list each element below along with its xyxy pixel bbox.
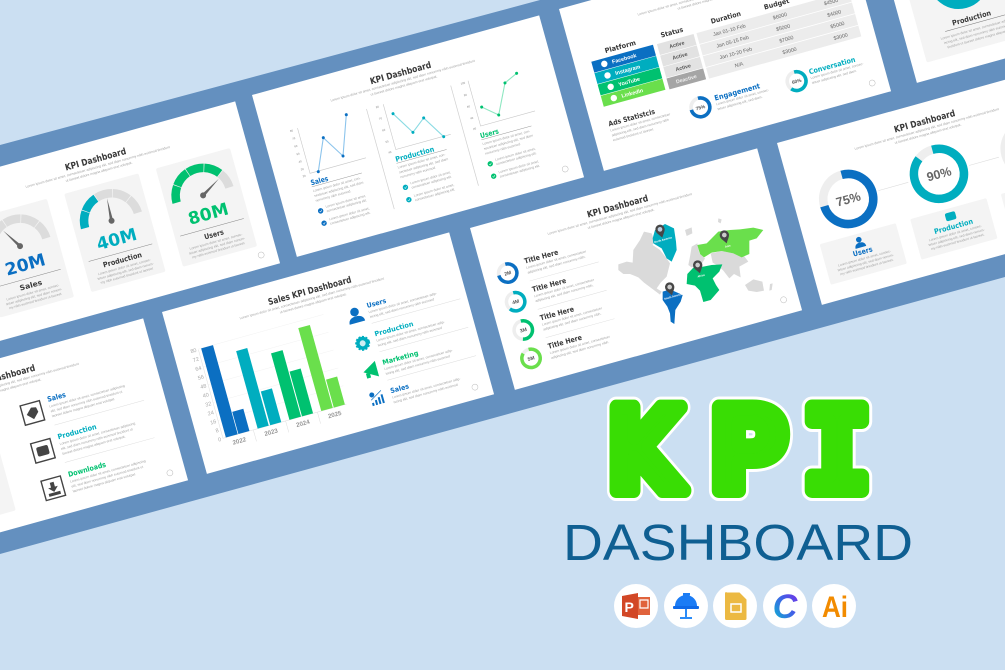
duration and budget table (694, 0, 861, 79)
text block: users (479, 118, 543, 181)
donut: engagement: 75% (695, 104, 707, 112)
bar chart: 2022 (232, 436, 248, 447)
bar chart: 16 (210, 419, 217, 426)
list item: production: laoreet dolore magna aliquam erat volutpat. (62, 434, 126, 456)
line chart: users: 20 (473, 126, 477, 131)
legend item: sales: Sales (389, 382, 410, 395)
donut: conversation (785, 53, 866, 93)
donut: conversation: tetuer adipiscing elit, sed diam. (811, 69, 857, 85)
subtitle: DASHBOARD: DASHBOARD (563, 514, 913, 571)
panel: icon list slide (0, 318, 188, 560)
map labels: Asia (724, 243, 731, 249)
donut card: users (803, 164, 907, 285)
stat: 5M: 5M (527, 355, 535, 363)
duration and budget table: $6000 (772, 12, 788, 22)
legend item: sales: Lorem ipsum dolor sit amet, consectetuer adip- (392, 377, 461, 400)
stat: 4M: Title Here (531, 276, 567, 294)
duration and budget table: $5000 (830, 21, 845, 30)
title: KPI: P (709, 385, 788, 518)
bar chart: 2024 (295, 419, 311, 429)
icon: Canva (763, 584, 807, 628)
text block: production: nonummy nibh euismod. (400, 166, 437, 179)
map pin: South America (664, 281, 676, 297)
duration and budget table: $3000 (833, 32, 849, 42)
stat: 3M: 3M (519, 327, 528, 335)
line chart: sales: 30 (300, 167, 305, 172)
title: KPI: I (803, 384, 871, 518)
donut card: production: my nibh euismod tincidunt ut laoreet. (931, 232, 985, 251)
text block: users: consectetuer adipiscing elit. (496, 151, 537, 166)
stat: 5M: adipiscing elit, sed diam nonummy nibh. (551, 340, 610, 360)
donut: conversation: 60% (791, 78, 803, 86)
legend item: sales (369, 369, 462, 410)
text block: production: Production (394, 144, 435, 164)
stat: 4M (504, 266, 607, 317)
status column: Active (672, 52, 689, 62)
legend item: production: Production (374, 320, 414, 338)
panel: line chart slide (252, 15, 584, 257)
legend item: users: Users (366, 297, 387, 310)
stat: 2M (496, 238, 599, 289)
legend item: production (354, 306, 468, 357)
legend item: production: iscing elit, sed diam nonummy nibh euismod (377, 326, 443, 347)
panel: world map slide: KPI Dashboard (586, 194, 650, 220)
text block: sales: consectetuer adipiscing elit. (330, 211, 371, 226)
line chart: users: 40 (470, 116, 474, 120)
line chart: production: 80 (375, 104, 380, 109)
list item: production: elit, sed diam nonummy nibh euismod tincidunt ut (61, 427, 133, 451)
legend item: marketing: iscing elit, sed diam nonummy nibh euismod (385, 354, 450, 376)
bar chart: 72 (192, 357, 200, 364)
panel: gauge slide: Lorem ipsum dolor sit amet, consectetuer adipiscing elit, sed diam nonummy nibh euismod tincidunt (25, 145, 170, 189)
duration and budget table: $4000 (827, 9, 842, 19)
gauge card: production (64, 173, 166, 292)
icon: Illustrator: Ai (822, 591, 848, 624)
panel: line chart slide: Lorem ipsum dolor sit amet, consectetuer adipiscing elit, sed diam nonummy nibh euismod tincidunt (330, 59, 475, 103)
stat: 3M: Title Here (539, 304, 575, 322)
ads statistics text: Ads Statistcis (608, 108, 656, 128)
donut card: users: Lorem ipsum dolor sit amet, consec- (838, 249, 891, 268)
duration and budget table: $3000 (782, 47, 798, 56)
legend item: users: iscing elit, sed diam nonummy nibh euismod (369, 297, 435, 319)
donut card: third partial (984, 114, 1005, 235)
panel: world map slide: ut laoreet dolore magna aliquam erat volutpat. (587, 208, 655, 230)
status column (654, 23, 706, 89)
list item: downloads: Downloads (67, 460, 107, 479)
legend item: sales: iscing elit, sed diam nonummy nibh euismod (393, 383, 458, 404)
bar chart (190, 312, 351, 452)
gauge card: users (156, 148, 257, 267)
duration and budget table: Jan 01-10 Feb (713, 23, 747, 38)
gauge card: users: my nibh euismod tincidunt ut laoreet (192, 241, 245, 259)
panel: gauge slide: KPI Dashboard (64, 147, 128, 173)
ads statistics text: Lorem ipsum dolor sit amet, consectetuer (610, 112, 672, 133)
donut card: users: tetuer adipiscing elit, sed diam nonum- (837, 253, 894, 272)
line chart: sales: 60 (294, 144, 298, 148)
ads statistics text: adipiscing elit, sed diam nonummy nibh (611, 118, 669, 137)
map pin: Asia (719, 229, 731, 245)
text block: users: Users (479, 127, 500, 140)
stat: 3M (511, 295, 614, 345)
platform column: LinkedIn (621, 88, 644, 100)
donut card: production: 90% (925, 164, 953, 184)
list item: downloads: laoreet dolore magna aliquam erat volutpat. (72, 472, 136, 493)
list item: downloads: elit, sed diam nonummy nibh euismod tincidunt ut (71, 465, 144, 489)
map labels: South America (664, 292, 683, 301)
duration and budget table: $7000 (779, 35, 794, 45)
panel: world map slide: Lorem ipsum dolor sit amet, consectetuer adipiscing elit, sed diam nonummy nibh euismod tincidunt (547, 192, 692, 236)
gauge card: sales (0, 199, 74, 318)
gauge card: production: 40M (94, 225, 139, 255)
duration and budget table: $5000 (776, 23, 791, 33)
duration and budget table: Jan 10-20 Feb (719, 46, 753, 61)
map labels (654, 235, 731, 301)
gauge card: users: 80M (186, 200, 231, 230)
gauge card: production: my nibh euismod tincidunt ut laoreet (100, 266, 154, 285)
bar chart: 2023 (264, 427, 279, 438)
list item: downloads: Lorem ipsum dolor sit amet, consectetuer adipiscing (70, 459, 146, 484)
stat: 4M: adipiscing elit, sed diam nonummy nibh. (535, 283, 594, 303)
stat: 2M: adipiscing elit, sed diam nonummy nibh. (527, 255, 586, 275)
gauge card: users: Users (203, 227, 225, 241)
panel: gauge slide (0, 101, 280, 343)
line chart: sales: 50 (296, 151, 300, 156)
map labels: North America (654, 235, 673, 244)
legend item: marketing: Lorem ipsum dolor sit amet, consectetuer adip- (384, 348, 453, 371)
icon: Google Slides (713, 584, 757, 628)
text block: production: Lorem ipsum dolor sit amet, (413, 183, 455, 198)
donut: engagement: tetuer adipiscing elit, sed diam. (717, 95, 763, 111)
panel: gauge slide: ut laoreet dolore magna aliquam erat volutpat. (65, 161, 133, 183)
line chart: production: 70 (378, 116, 383, 121)
bar chart: 24 (207, 410, 215, 418)
gauge card: users: tetuer adipiscing elit, sed diam nonum- (189, 236, 246, 256)
panel: partial top right slide: Production (951, 8, 992, 28)
bar chart: 8 (215, 428, 220, 435)
list item: sales (19, 370, 144, 433)
list item: sales: elit, sed diam nonummy nibh euismod tincidunt ut (50, 390, 123, 413)
stat: 4M: Lorem ipsum dolor sit amet, consectetuer (534, 278, 595, 298)
list item: production: Production (57, 422, 98, 441)
panel: ads table slide (559, 0, 891, 171)
text block: users: Lorem ipsum dolor sit amet, (498, 159, 540, 174)
bar chart: 0 (218, 437, 222, 444)
donut card: users: Users (852, 245, 873, 259)
map pin: Africa (692, 259, 704, 275)
text block: sales: Lorem ipsum dolor sit amet, con- (312, 176, 361, 193)
text block: production: sectetuer adipiscing elit, sed diam (399, 157, 449, 174)
stat: 2M: 2M (504, 270, 512, 278)
line chart: sales: 80 (290, 128, 294, 133)
list item: downloads (40, 449, 149, 501)
line chart: sales: 20 (302, 174, 307, 178)
panel: line chart slide: KPI Dashboard (369, 61, 432, 87)
text block: users: Lorem ipsum dolor sit amet, (495, 147, 536, 162)
text block: sales: nonummy nibh euismod. (315, 189, 352, 203)
gauge card: production: Production (102, 250, 143, 269)
donut card: users: 75% (834, 189, 862, 210)
panel: donut slide: KPI Dashboard (893, 109, 957, 135)
panel: sales bar chart slide: ut laoreet dolore magna aliquam erat volutpat. (279, 292, 347, 314)
gauge card: production: Lorem ipsum dolor sit amet, consec- (98, 258, 151, 276)
ads statistics text (608, 104, 674, 142)
bar chart: 32 (205, 401, 212, 409)
gauge card: production: tetuer adipiscing elit, sed diam nonum- (97, 262, 154, 281)
bar chart: 64 (195, 366, 202, 373)
legend item: production: Lorem ipsum dolor sit amet, consectetuer adip- (376, 320, 445, 343)
text block: sales: Lorem ipsum dolor sit amet, (325, 194, 366, 209)
line chart: production: 60 (382, 128, 386, 132)
line chart: users: 100 (460, 81, 466, 86)
stat: 5M: Title Here (547, 333, 583, 351)
donut: engagement: Lorem ipsum dolor sit amet, consec- (716, 88, 769, 106)
line chart: production (375, 88, 452, 155)
donut card: production (894, 139, 998, 260)
panel: donut slide (777, 63, 1005, 305)
icon: Canva: C (773, 588, 798, 626)
text block: production: consectetuer adipiscing elit. (411, 175, 452, 190)
platform column: Facebook (611, 53, 637, 66)
status column: Active (669, 40, 685, 50)
status column: Status (660, 26, 684, 40)
panel: donut slide: Lorem ipsum dolor sit amet, consectetuer adipiscing elit, sed diam nonummy nibh euismod tincidunt (854, 107, 999, 151)
text block: users: sectetuer adipiscing elit, sed diam (483, 133, 534, 151)
donut: engagement: Engagement (713, 81, 761, 103)
donut: conversation: Conversation (808, 55, 856, 76)
title: KPI: K (607, 385, 686, 517)
line chart: users (460, 65, 536, 131)
text block: sales: Lorem ipsum dolor sit amet, (329, 206, 370, 221)
list item: production (30, 408, 154, 470)
icon: Illustrator (812, 584, 856, 628)
map pin: North America (654, 224, 667, 239)
icon: PowerPoint: P (624, 599, 634, 615)
gauge card: sales: 20M (3, 250, 48, 281)
text block: sales: Sales (309, 174, 329, 187)
donut: engagement (689, 79, 771, 119)
title: KPI: K (607, 385, 686, 517)
panel: donut slide: ut laoreet dolore magna aliquam erat volutpat. (894, 123, 962, 145)
status column: Deactive (675, 74, 698, 85)
title: KPI (607, 384, 871, 518)
donut: conversation: Lorem ipsum dolor sit amet, consec- (810, 62, 864, 80)
donut card: users: my nibh euismod tincidunt ut laoreet. (840, 258, 894, 276)
line chart: sales: 70 (292, 136, 296, 141)
icon: PowerPoint (614, 584, 658, 628)
gauge card: sales: Sales (19, 278, 43, 293)
donut card: production: tetuer adipiscing elit, sed diam nonum- (928, 228, 985, 247)
stat: 3M: Lorem ipsum dolor sit amet, consectetuer (541, 306, 603, 327)
panel: sales bar chart slide (162, 232, 494, 474)
legend item: marketing (361, 334, 476, 386)
duration and budget table: Duration (710, 10, 742, 26)
donut card: production: Production (933, 217, 974, 236)
legend item: users: Lorem ipsum dolor sit amet, consectetuer adip- (368, 291, 437, 314)
text block: sales (309, 165, 373, 228)
panel: line chart slide: ut laoreet dolore magna aliquam erat volutpat. (370, 74, 438, 97)
stat: 3M: adipiscing elit, sed diam nonummy nibh. (543, 312, 602, 332)
status column: Active (675, 63, 692, 73)
list item: sales: Sales (46, 390, 67, 404)
platform column (588, 35, 665, 107)
duration and budget table: N/A (734, 61, 745, 69)
duration and budget table: Jan 05-15 Feb (716, 35, 750, 50)
bar chart: 48 (200, 383, 207, 391)
gauge card: users: Lorem ipsum dolor sit amet, consec- (189, 232, 243, 251)
panel: sales bar chart slide: Sales KPI Dashboard (267, 275, 353, 308)
world map (618, 218, 773, 324)
stat: 5M: Lorem ipsum dolor sit amet, consectetuer (549, 334, 611, 355)
gauge card: sales: tetuer adipiscing elit, sed diam nonum- (6, 287, 63, 306)
text block: production (394, 141, 458, 204)
map labels: Africa (697, 273, 706, 279)
platform column: YouTube (618, 77, 641, 88)
panel: partial top right slide (872, 0, 1005, 83)
icon: Keynote (664, 584, 708, 628)
bar chart: 40 (202, 392, 210, 400)
gauge card: sales: my nibh euismod tincidunt ut laoreet (9, 292, 62, 310)
stat: 5M (519, 325, 613, 370)
panel: world map slide (470, 148, 802, 390)
text block: users: nonummy nibh euismod. (485, 142, 521, 156)
bar chart: 2025 (327, 410, 343, 420)
text block: production: Lorem ipsum dolor sit amet, (410, 170, 451, 185)
stat: 4M: 4M (512, 299, 520, 306)
text block: production: Lorem ipsum dolor sit amet, con- (397, 153, 446, 170)
text block: production: consectetuer adipiscing elit. (415, 187, 456, 202)
gauge card: sales: Lorem ipsum dolor sit amet, consec- (6, 283, 60, 302)
line chart: sales (289, 111, 367, 178)
list item: production: Lorem ipsum dolor sit amet, consectetuer adipiscing (59, 421, 136, 446)
legend item: marketing: Marketing (382, 349, 419, 367)
list item: sales: laoreet dolore magna aliquam erat volutpat. (51, 397, 116, 418)
stat: 2M: Lorem ipsum dolor sit amet, consectetuer (526, 249, 588, 270)
title: KPI: I (803, 384, 871, 518)
donut card: production: Lorem ipsum dolor sit amet, consec- (928, 224, 982, 242)
stat: 2M: Title Here (523, 247, 559, 266)
platform column: Platform (604, 39, 637, 55)
legend item: users (345, 278, 460, 329)
line chart: production: 40 (388, 150, 392, 155)
bar chart: 80 (190, 348, 197, 355)
panel: sales bar chart slide: Lorem ipsum dolor sit amet, consectetuer adipiscing elit, sed diam nonummy nibh euismod tincidunt (239, 277, 385, 320)
platform column: Instagram (615, 64, 641, 77)
line chart: production: 50 (385, 139, 389, 144)
text block: sales: sectetuer adipiscing elit, sed diam (314, 180, 364, 198)
title: KPI: P (709, 385, 788, 518)
ads statistics text: euismod tincidunt ut laoreet. (613, 127, 655, 142)
text block: users: Lorem ipsum dolor sit amet, con- (482, 129, 531, 146)
line chart: sales: 40 (298, 159, 303, 164)
list item: sales: Lorem ipsum dolor sit amet, consectetuer adipiscing (49, 384, 125, 409)
text block: users: consectetuer adipiscing elit. (499, 164, 541, 179)
text block: sales: consectetuer adipiscing elit. (326, 198, 368, 213)
line chart: users: 80 (463, 93, 468, 97)
line chart: users: 60 (466, 104, 471, 109)
bar chart: 56 (197, 374, 205, 382)
